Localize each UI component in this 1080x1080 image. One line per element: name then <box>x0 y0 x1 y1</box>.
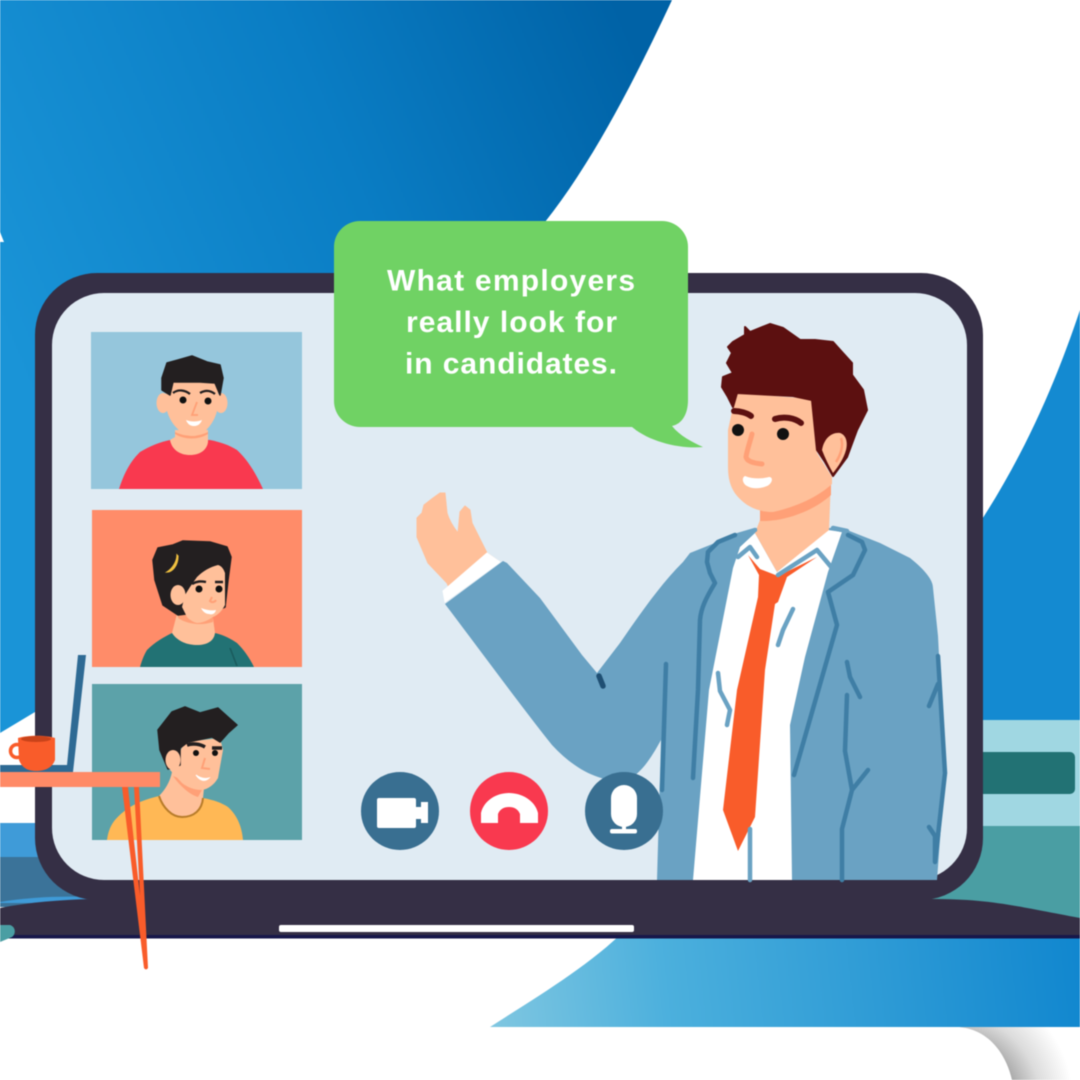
hair <box>722 324 867 476</box>
tie <box>723 555 817 851</box>
table legs <box>122 787 148 970</box>
shirt cuff <box>443 553 500 602</box>
speech bubble <box>334 221 703 447</box>
teal object <box>0 925 15 942</box>
sleeve fold <box>599 676 603 686</box>
speech bubble text: What employers <box>387 264 635 298</box>
speech bubble text <box>387 264 635 380</box>
left background shelf <box>0 823 100 907</box>
speech bubble text: really look for <box>406 306 617 339</box>
white arrow tip at left edge <box>0 232 4 242</box>
laptop frame <box>35 273 983 900</box>
ear <box>822 433 847 473</box>
presenter <box>417 324 945 880</box>
jacket lines <box>662 535 945 880</box>
neck <box>755 480 831 572</box>
call control: microphone <box>585 772 663 850</box>
blue swoosh bottom <box>490 930 1080 1027</box>
blue swoosh right <box>960 310 1080 760</box>
laptop <box>0 273 1080 938</box>
blue swoosh top left <box>0 0 672 733</box>
participant tile 3 <box>92 684 302 840</box>
trackpad bar <box>279 925 634 932</box>
laptop base <box>0 899 1080 938</box>
eyebrows <box>734 411 801 423</box>
smile <box>743 476 772 488</box>
eyes <box>732 424 789 440</box>
right background shelf <box>900 720 1080 926</box>
desk scene <box>0 655 160 970</box>
mug <box>10 736 55 771</box>
collar lines <box>718 528 847 880</box>
face <box>728 393 832 512</box>
small laptop <box>0 655 86 772</box>
participant tile 2 <box>92 510 302 667</box>
call control: hang up <box>470 772 548 850</box>
laptop screen <box>52 293 967 880</box>
nose <box>746 434 762 464</box>
speech bubble text: in candidates. <box>405 348 617 380</box>
hand <box>417 493 497 590</box>
call control: camera <box>361 772 439 850</box>
participant tile 1 <box>91 332 302 489</box>
table top <box>0 772 160 787</box>
shirt <box>693 530 842 880</box>
jacket and arm <box>445 528 945 880</box>
bottom white card <box>0 1027 1080 1080</box>
